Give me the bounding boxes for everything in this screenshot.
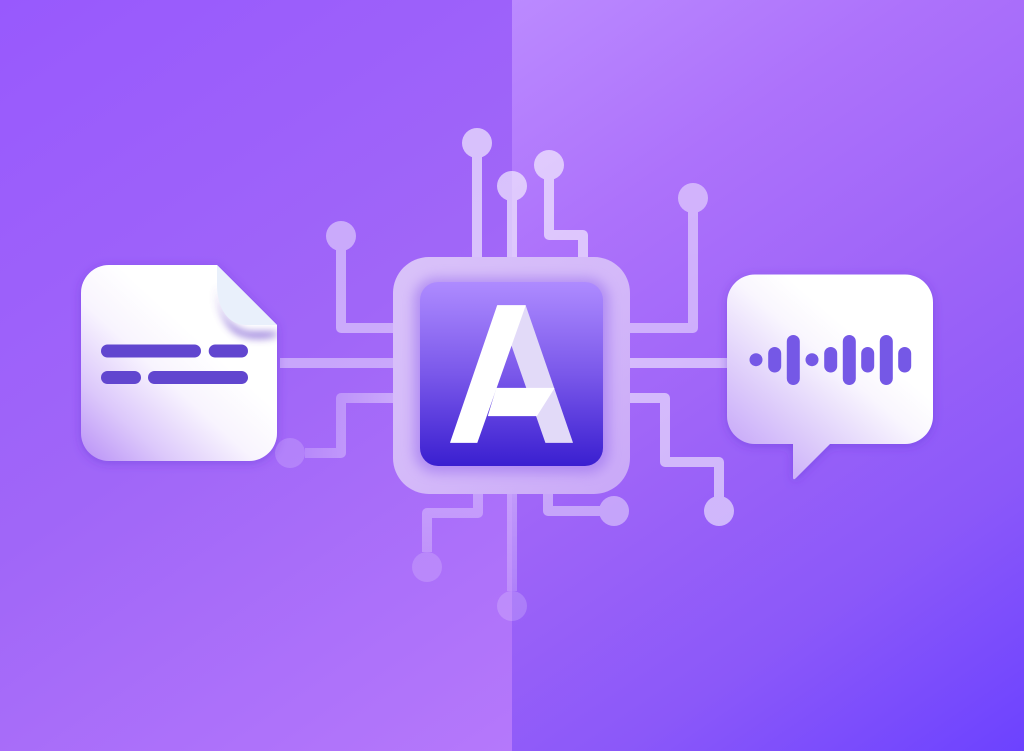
document sheet (81, 265, 277, 461)
circuit traces and nodes (275, 128, 734, 621)
AI chip (393, 257, 630, 494)
chip outer frame (393, 257, 630, 494)
chip inner glow (414, 278, 609, 473)
bubble shape (727, 274, 933, 479)
speech bubble card (727, 274, 933, 479)
logo letter A (450, 306, 572, 442)
fold shadow (217, 285, 277, 338)
text lines (101, 344, 248, 384)
document card (81, 265, 277, 461)
background: left half (0, 0, 512, 751)
background: right half (512, 0, 1024, 751)
sound wave bars (750, 335, 911, 385)
folded corner (217, 265, 277, 325)
chip inner square (420, 282, 603, 466)
